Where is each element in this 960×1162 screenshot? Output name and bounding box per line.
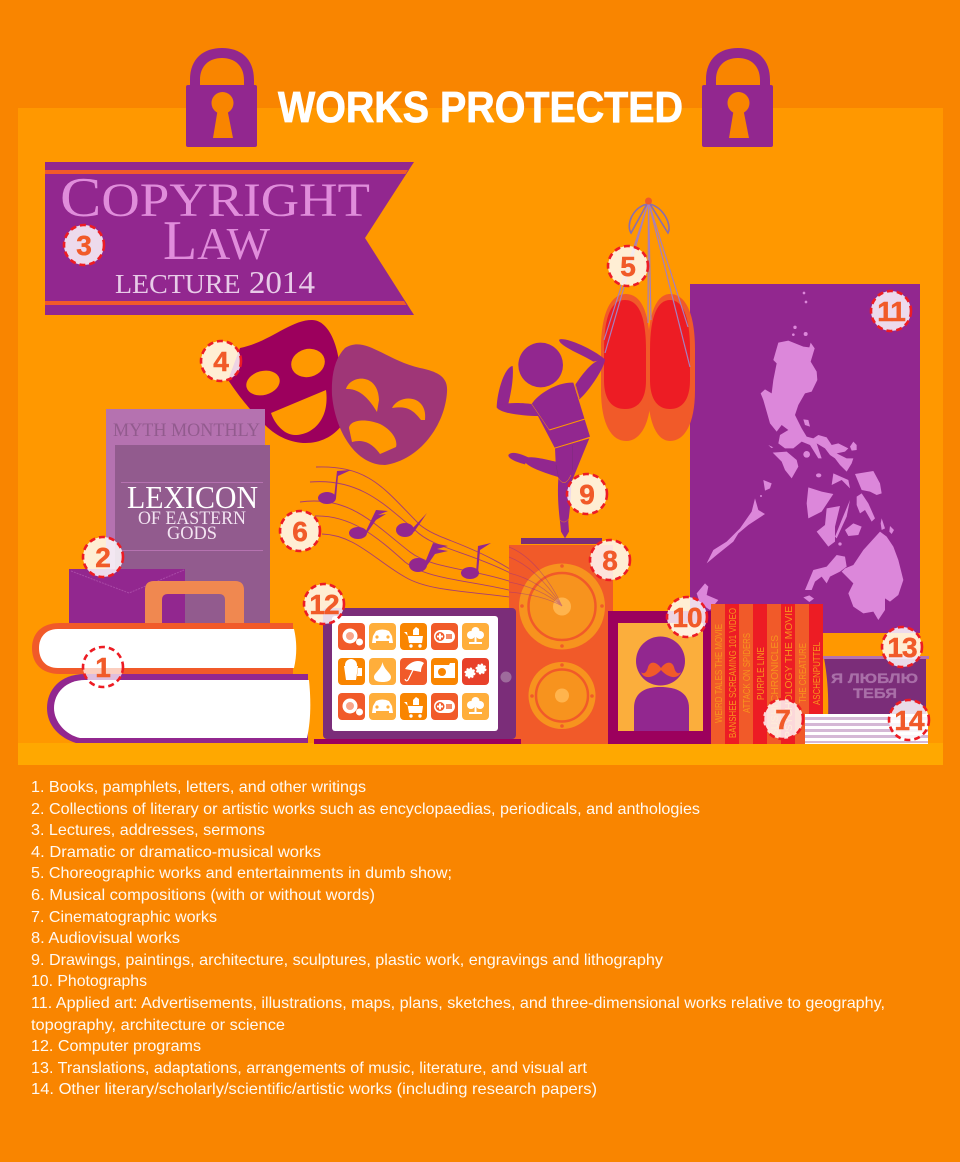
translated book: [823, 656, 929, 735]
book: Lexicon of Eastern Gods: LEXICON: [127, 479, 258, 515]
DVD spines: PURPLE LINE: [756, 647, 767, 700]
badge 14: 14: [894, 705, 925, 736]
text block: list of protected works: 7. Cinematographic works: [31, 909, 217, 926]
DVD spines: ASCHENPUTTEL: [812, 642, 823, 705]
DVD spines: BANSHEE SCREAMING 101 VIDEO: [728, 608, 739, 738]
badge 8: 8: [602, 545, 618, 576]
icon: left padlock: [186, 48, 257, 147]
dancer sculpture: [497, 339, 605, 538]
text block: list of protected works: 13. Translations, adaptations, arrangements of music, literature, and visual art: [31, 1060, 588, 1077]
speaker: [509, 538, 613, 744]
text block: list of protected works: 10. Photographs: [31, 973, 147, 990]
banner: copyright law lecture: [45, 162, 414, 315]
badge 1: 1: [95, 652, 111, 683]
text block: list of protected works: 1. Books, pamphlets, letters, and other writings: [31, 779, 366, 796]
DVD spines: SUSHI CHRONICLES: [770, 635, 781, 736]
text block: list of protected works: 6. Musical compositions (with or without words): [31, 887, 375, 904]
text block: list of protected works: 4. Dramatic or dramatico-musical works: [31, 844, 321, 861]
badge 9: 9: [579, 479, 595, 510]
book: Lexicon of Eastern Gods: [115, 445, 270, 623]
badge 8: [590, 540, 630, 580]
icon: right padlock: [702, 48, 773, 147]
paper stack: [805, 714, 928, 744]
badge 13: [882, 627, 922, 667]
badge 3: [64, 225, 104, 265]
badge 11: [871, 291, 911, 331]
translated book: Я ЛЮБЛЮ: [831, 670, 918, 686]
briefcase handle: [145, 581, 244, 623]
map panel: Philippines: [690, 284, 920, 633]
banner: copyright law lecture: LECTURE 2014: [115, 264, 315, 300]
text block: list of protected works: 3. Lectures, addresses, sermons: [31, 822, 265, 839]
badge 2: [83, 537, 123, 577]
book: Lexicon of Eastern Gods: OF EASTERN: [138, 508, 246, 529]
badge 5: 5: [620, 251, 636, 282]
title: WORKS PROTECTED: [278, 83, 683, 132]
badge 12: [304, 584, 344, 624]
panel: illustration area: [18, 108, 943, 765]
badge 2: 2: [95, 542, 111, 573]
text block: list of protected works: 12. Computer programs: [31, 1038, 201, 1055]
badge 5: [608, 246, 648, 286]
badge 7: 7: [775, 704, 791, 735]
text block: list of protected works: 8. Audiovisual works: [31, 930, 180, 947]
icon: comedy mask: [228, 320, 342, 443]
DVD spines: ATTACK ON SPIDERS: [742, 633, 753, 713]
DVD spines: WEIRD TALES THE MOVIE: [714, 624, 725, 723]
text block: list of protected works: 5. Choreographic works and entertainments in dumb show;: [31, 865, 452, 882]
banner: copyright law lecture: LAW: [163, 210, 271, 272]
photo frame with mustache portrait: [608, 611, 713, 744]
badge 6: [280, 511, 320, 551]
badge 14: [889, 700, 929, 740]
books: stack: [32, 623, 310, 743]
badge 3: 3: [76, 230, 92, 261]
DVD spines: PSYCHOLOGY THE MOVIE: [784, 606, 795, 738]
tablet with app icons: [314, 608, 521, 744]
badge 10: 10: [672, 602, 702, 633]
text block: list of protected works: 14. Other literary/scholarly/scientific/artistic works (including research papers): [31, 1081, 597, 1098]
text block: list of protected works: 9. Drawings, paintings, architecture, sculptures, plastic work, engravings and lithography: [31, 952, 663, 969]
badge 4: 4: [213, 346, 229, 377]
translated book: ТЕБЯ: [853, 685, 897, 701]
badge 11: 11: [877, 296, 905, 327]
DVD spines: THE CREATURE: [798, 643, 809, 703]
badge 6: 6: [292, 516, 308, 547]
badge 1: [83, 647, 123, 687]
badge 10: [667, 597, 707, 637]
music staves and notes: [300, 467, 562, 606]
text block: list of protected works: topography, architecture or science: [31, 1017, 285, 1034]
text block: list of protected works: 2. Collections of literary or artistic works such as encyclopaedias, periodicals, and anthologies: [31, 801, 700, 818]
text block: list of protected works: [31, 779, 885, 1098]
badge 12: 12: [309, 589, 339, 620]
banner: copyright law lecture: COPYRIGHT: [60, 167, 370, 229]
badge 7: [763, 699, 803, 739]
magazine: Myth Monthly: [106, 409, 265, 623]
magazine: Myth Monthly: MYTH MONTHLY: [113, 420, 260, 441]
text block: list of protected works: 11. Applied art: Advertisements, illustrations, maps, plans, sketches, and three-dimensional works relative to geography,: [31, 995, 885, 1012]
badge 4: [201, 341, 241, 381]
icon: tragedy mask: [332, 344, 447, 465]
DVD spines: [711, 604, 823, 744]
badge 13: 13: [887, 632, 917, 663]
badge 9: [567, 474, 607, 514]
envelope / letter: [69, 569, 185, 623]
book: Lexicon of Eastern Gods: GODS: [167, 523, 217, 544]
icon: ballet shoes: [601, 198, 695, 441]
